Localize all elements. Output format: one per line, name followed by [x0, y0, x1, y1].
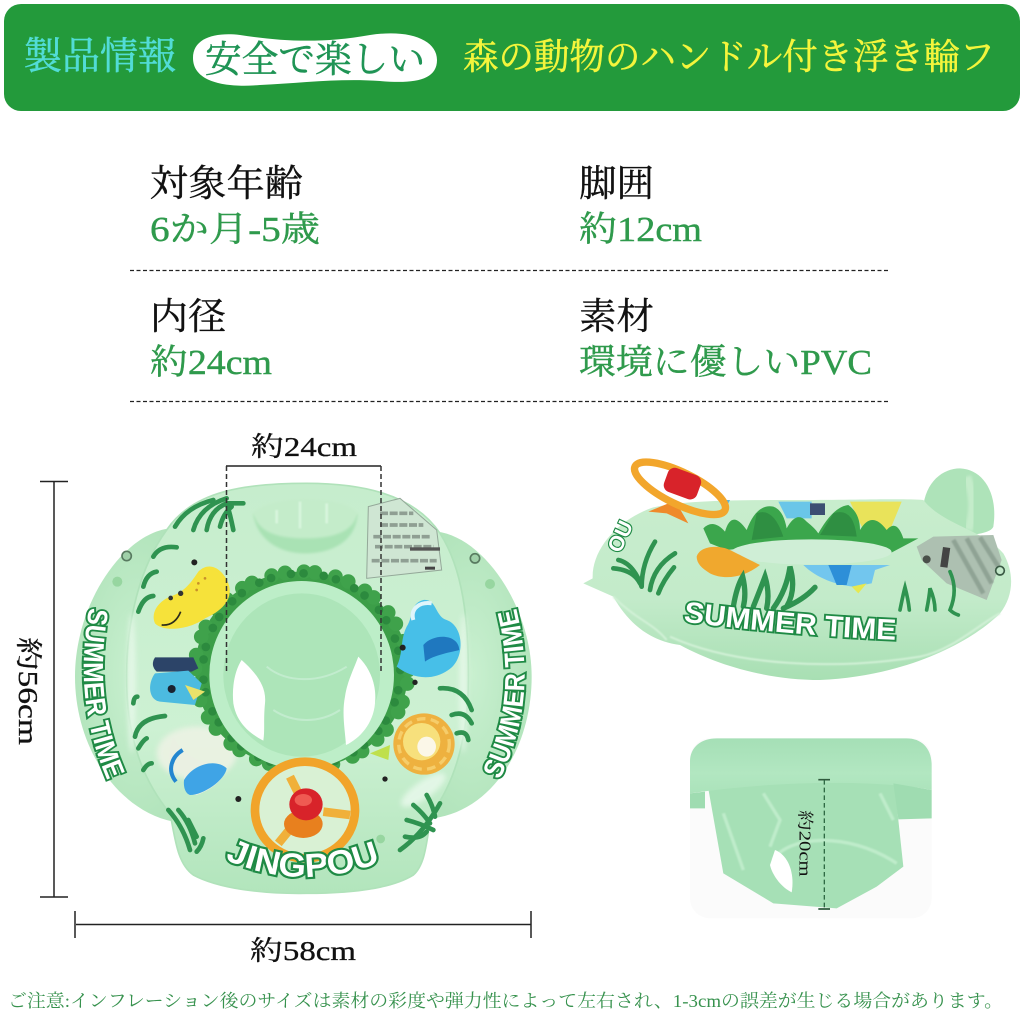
blue bird print [803, 565, 890, 593]
main ring body [127, 483, 468, 893]
product: side view swim ring [584, 458, 1012, 680]
dimension: seat 20cm: 約20cm [795, 810, 814, 877]
brand text JINGPOU: JINGPOU [225, 838, 379, 880]
steering wheel [628, 452, 732, 525]
dimension: inner 24cm [226, 432, 381, 671]
bear illustration [150, 657, 205, 705]
side lobes [75, 528, 532, 822]
spec: material: 環境に優しいPVC [579, 343, 872, 382]
dimension: height 56cm [13, 481, 68, 897]
printed animals behind grass [718, 500, 902, 530]
lighter fold highlights [723, 793, 897, 870]
spec: inner diameter: 内径 [150, 296, 226, 338]
dimension: inner 24cm: 約24cm [251, 432, 357, 462]
product: top view swim ring: SUMMER TIME [81, 607, 128, 782]
top ring band [690, 738, 932, 808]
spec: leg circumference: 脚囲 [579, 164, 654, 205]
palm leaves [133, 498, 472, 852]
lion illustration [370, 713, 455, 775]
hippo illustration [154, 559, 230, 629]
right text SUMMER TIME: SUMMER TIME [482, 606, 527, 780]
headrest bump [923, 468, 994, 535]
grass wreath [703, 505, 918, 553]
white blob label: 安全で楽しい [205, 39, 425, 81]
spec: leg circumference [579, 164, 702, 249]
valve [996, 566, 1004, 575]
lion print [697, 547, 760, 577]
body seam [613, 597, 1000, 664]
spec: inner diameter [150, 296, 272, 382]
headrest [253, 499, 357, 553]
dimension: height 56cm: 約56cm [13, 637, 43, 745]
leaf wreath [195, 572, 408, 768]
valves [112, 551, 495, 843]
spec: inner diameter: 約24cm [150, 343, 272, 382]
inset: seat depth detail [690, 738, 932, 918]
ring body [583, 499, 1011, 680]
header banner [4, 4, 1020, 111]
spec: leg circumference: 約12cm [579, 210, 702, 249]
spec: material [579, 296, 872, 382]
care label [367, 498, 442, 578]
spec: material: 素材 [579, 296, 654, 338]
dimension: seat 20cm [795, 780, 830, 909]
seat pouch [705, 770, 903, 908]
inset background [690, 738, 932, 918]
footnote: ご注意:インフレーション後のサイズは素材の彩度や弾力性によって左右され、1-3cmの誤差が生じる場合があります。 [8, 991, 1003, 1011]
banner title: 森の動物のハンドル付き浮き輪フ [463, 37, 995, 77]
elephant illustration [397, 600, 461, 685]
leaves [613, 542, 958, 615]
highlights [128, 613, 467, 812]
product: side view swim ring: SUMMER TIME [682, 600, 897, 642]
care label [917, 535, 1002, 600]
spec: target age: 対象年齢 [150, 163, 303, 205]
steering wheel [255, 762, 355, 858]
leg hole [770, 850, 793, 892]
seat opening [732, 539, 892, 565]
product: top view swim ring [75, 482, 532, 894]
spec: target age: 6か月-5歳 [150, 210, 320, 249]
dimension: width 58cm [75, 911, 531, 966]
blue bird illustration [169, 737, 388, 802]
dimension: width 58cm: 約58cm [250, 936, 356, 966]
partial brand print OU: OU [603, 517, 638, 556]
seat opening [209, 581, 394, 769]
heading: product info: 製品情報 [24, 36, 176, 78]
spec: target age [150, 163, 320, 249]
